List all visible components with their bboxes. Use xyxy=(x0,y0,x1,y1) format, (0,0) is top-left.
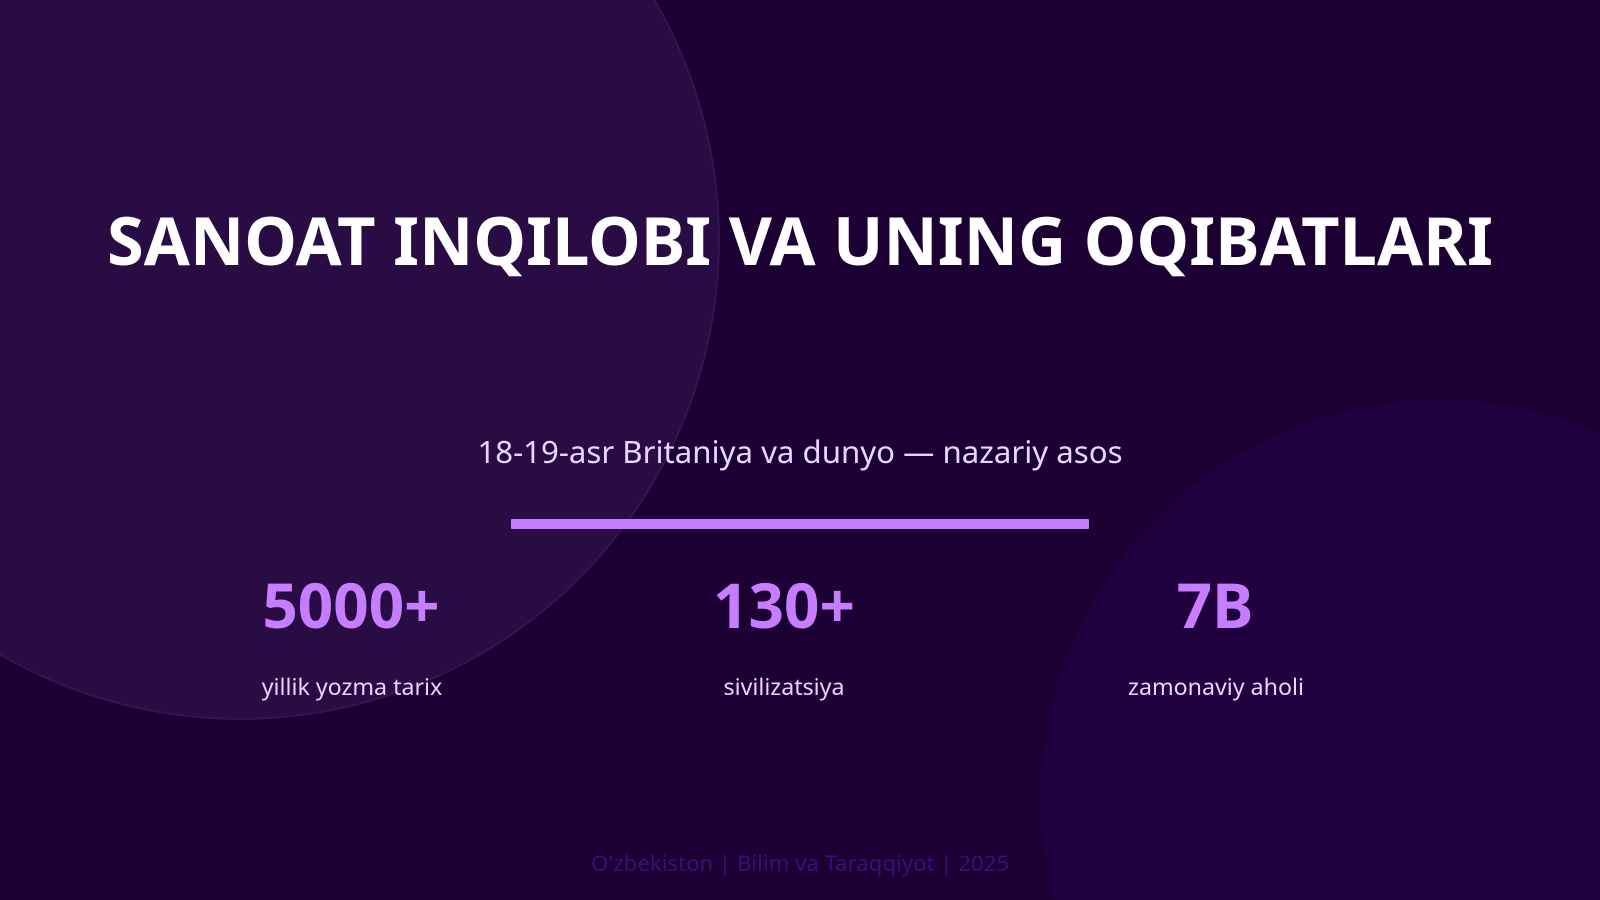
stat label: sivilizatsiya xyxy=(723,670,844,702)
title: SANOAT INQILOBI VA UNING OQIBATLARI xyxy=(107,194,1493,285)
stat value: 130+ xyxy=(713,563,855,647)
accent bar xyxy=(511,519,1089,529)
stat: written history xyxy=(262,563,442,702)
subtitle: 18-19-asr Britaniya va dunyo — nazariy asos xyxy=(477,431,1123,473)
circle: bottom right xyxy=(1038,398,1600,900)
stat value: 5000+ xyxy=(262,563,440,647)
footer: O'zbekiston | Bilim va Taraqqiyot | 2025 xyxy=(591,847,1009,878)
stat: modern population xyxy=(1128,563,1304,702)
stat label: zamonaviy aholi xyxy=(1128,670,1304,702)
circle: top left xyxy=(0,0,722,722)
stat: civilizations xyxy=(713,563,855,702)
stat value: 7B xyxy=(1177,563,1253,647)
stat label: yillik yozma tarix xyxy=(262,670,442,702)
